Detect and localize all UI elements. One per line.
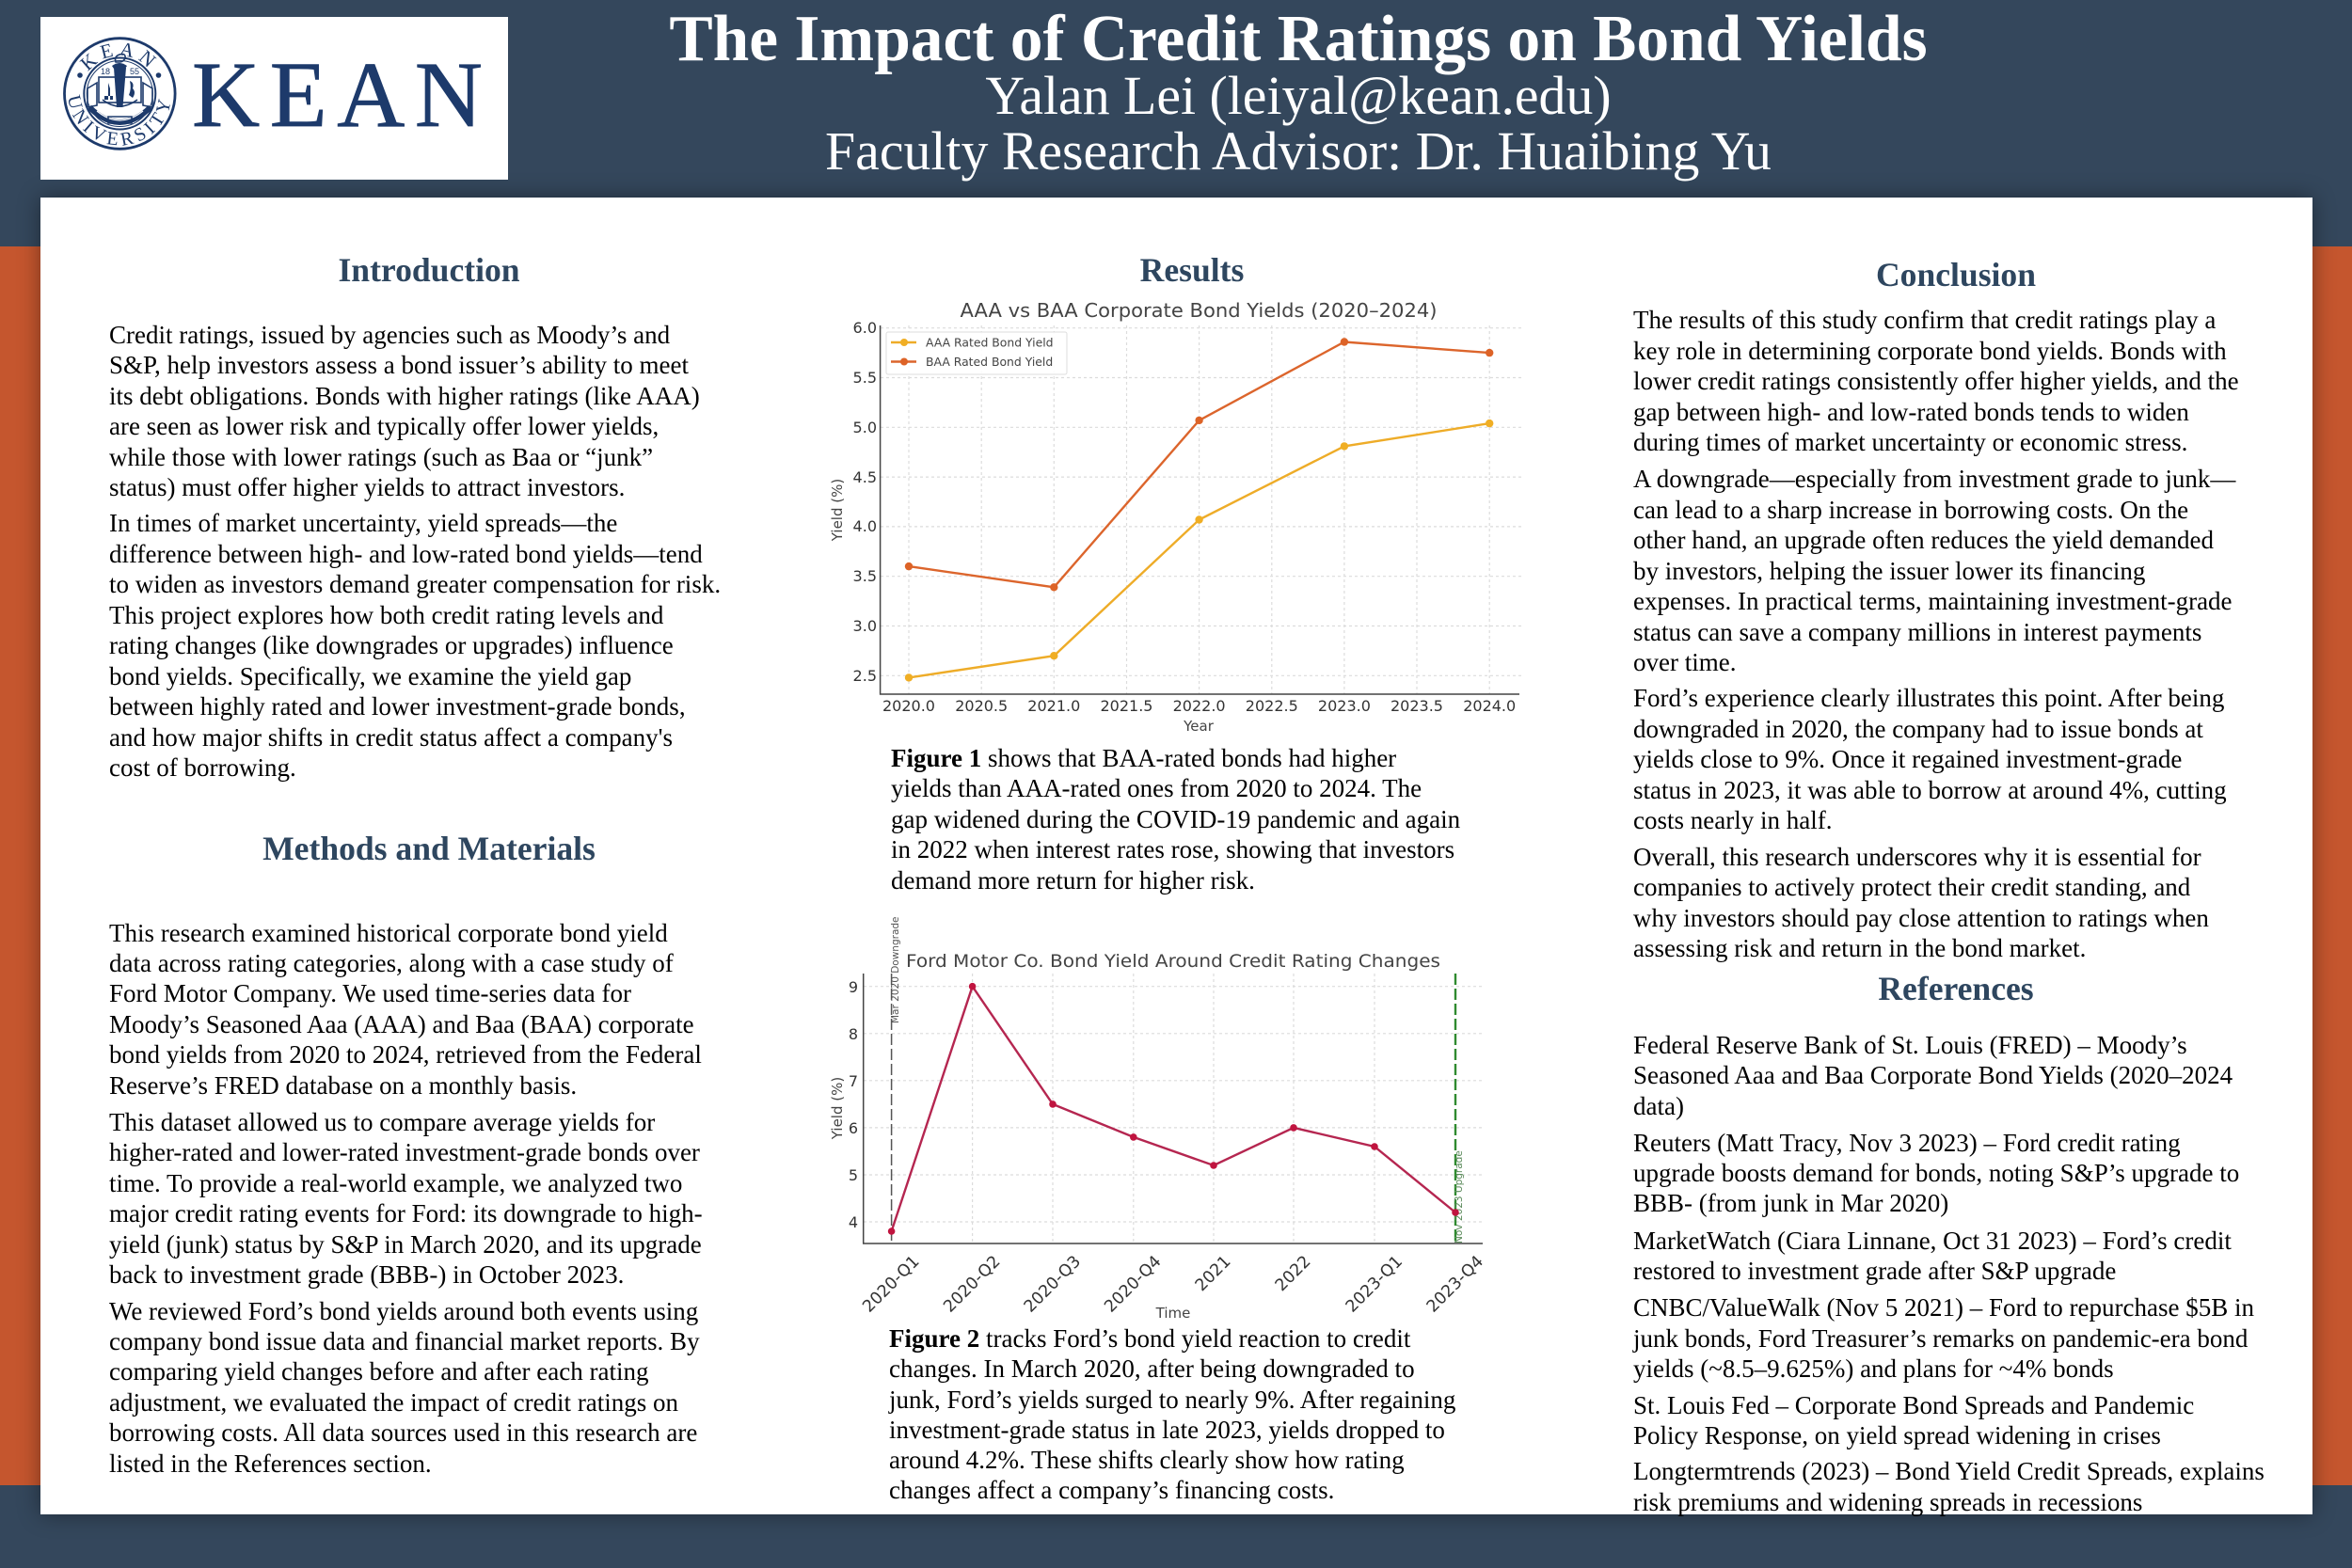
text: conclusion paragraph 1: The results of this study confirm that credit ratings play a [1633,306,2216,334]
y-axis ticks: 4.0 [853,517,877,535]
x-axis ticks: 2020-Q2 [940,1252,1005,1317]
caption: figure 1: Figure 1 shows that BAA-rated bonds had higher [891,744,1396,772]
text: methods paragraph 3 [109,1296,700,1478]
text: methods paragraph 1: Ford Motor Company. We used time-series data for [109,979,631,1007]
reference 2: Reuters (Matt Tracy, Nov 3 2023) – Ford credit rating [1633,1129,2181,1157]
caption: figure 1: yields than AAA-rated ones from 2020 to 2024. The [891,774,1422,802]
text: methods paragraph 1: This research examined historical corporate bond yield [109,918,668,946]
y-axis ticks [853,319,877,685]
text: introduction paragraph 1 [109,321,700,501]
reference 5 [1633,1391,2194,1449]
text: conclusion paragraph 3: Ford’s experience clearly illustrates this point. After being [1633,684,2224,712]
text: conclusion paragraph 4: assessing risk and return in the bond market. [1633,934,2086,962]
text: introduction paragraph 2 [109,509,721,782]
text: methods paragraph 3: adjustment, we evaluated the impact of credit ratings on [109,1388,678,1417]
caption: figure 2: junk, Ford’s yields surged to nearly 9%. After regaining [889,1386,1455,1414]
x-axis ticks: 2022.5 [1246,697,1298,715]
caption: figure 1: in 2022 when interest rates rose, showing that investors [891,835,1454,863]
text: methods paragraph 2: major credit rating events for Ford: its downgrade to high- [109,1199,703,1227]
chart: Ford bond yield line chart [829,916,1487,1322]
series: AAA [905,420,1493,682]
text: introduction paragraph 1: while those with lower ratings (such as Baa or “junk” [109,442,653,470]
y-axis ticks [849,978,858,1231]
reference 5: St. Louis Fed – Corporate Bond Spreads and Pandemic [1633,1391,2194,1419]
reference 3: restored to investment grade after S&P upgrade [1633,1257,2116,1285]
text: introduction paragraph 2: This project explores how both credit rating levels and [109,601,663,629]
reference 2 [1633,1129,2239,1217]
legend: BAA Rated Bond Yield [926,355,1053,369]
text: introduction paragraph 1: its debt obligations. Bonds with higher ratings (like AAA) [109,382,700,410]
y-axis ticks: 2.5 [853,667,877,685]
text: introduction paragraph 2: cost of borrowing. [109,753,296,782]
heading: references: References [1878,970,2034,1007]
heading: results: Results [1140,251,1244,289]
caption: figure 2: changes. In March 2020, after being downgraded to [889,1354,1415,1383]
x-axis ticks [882,697,1516,715]
caption: figure 2: changes affect a company’s financing costs. [889,1476,1334,1504]
panel: introduction [109,251,721,782]
text: methods paragraph 2: yield (junk) status by S&P in March 2020, and its upgrade [109,1230,702,1259]
x-axis ticks: 2020-Q3 [1021,1252,1085,1317]
x-axis ticks: 2020-Q4 [1101,1252,1166,1317]
caption: figure 1: gap widened during the COVID-19 pandemic and again [891,805,1460,833]
marker: upgrade line: Nov 2023 Upgrade [1454,1150,1465,1243]
background: orange side band [0,246,2352,1485]
faculty advisor: Faculty Research Advisor: Dr. Huaibing Yu [825,120,1772,181]
text: introduction paragraph 2: difference between high- and low-rated bond yields—tend [109,540,703,568]
heading: methods and materials: Methods and Materials [262,830,596,867]
panel: conclusion [1633,256,2239,962]
series: BAA [905,338,1493,591]
text: methods paragraph 3: We reviewed Ford’s bond yields around both events using [109,1296,698,1324]
axis label: yield: Yield (%) [829,479,846,542]
chart title: Ford Motor Co. Bond Yield Around Credit Rating Changes [906,951,1440,972]
series: Ford yield [888,983,1459,1235]
text: methods paragraph 3: comparing yield changes before and after each rating [109,1357,648,1386]
y-axis ticks: 9 [849,978,858,996]
text: conclusion paragraph 2: over time. [1633,648,1736,676]
text: conclusion paragraph 4: why investors should pay close attention to ratings when [1633,904,2209,932]
y-axis ticks: 5.5 [853,369,877,387]
text: conclusion paragraph 3: downgraded in 2020, the company had to issue bonds at [1633,715,2203,743]
y-axis ticks: 6.0 [853,319,877,337]
reference 4 [1632,1293,2254,1383]
text: methods paragraph 2 [109,1108,703,1289]
panel: results [829,251,1521,1504]
reference 6: risk premiums and widening spreads in recessions [1633,1488,2142,1516]
reference 1: data) [1633,1092,1684,1120]
y-axis ticks: 3.0 [853,617,877,635]
y-axis ticks: 6 [849,1119,858,1137]
text: introduction paragraph 2: between highly rated and lower investment-grade bonds, [109,692,686,721]
header: title and authors [669,3,1928,181]
text: methods paragraph 2: higher-rated and lower-rated investment-grade bonds over [109,1138,700,1166]
text: introduction paragraph 2: and how major shifts in credit status affect a company's [109,723,673,752]
y-axis ticks: 5 [849,1166,858,1184]
marker: downgrade line: Mar 2020 Downgrade [890,916,901,1023]
text: conclusion paragraph 1 [1633,306,2239,456]
logo: Kean University: KEAN [192,42,483,147]
reference 1: Seasoned Aaa and Baa Corporate Bond Yields (2020–2024 [1633,1061,2233,1089]
axis label: yield: Yield (%) [829,1077,846,1140]
caption: figure 2: Figure 2 tracks Ford’s bond yield reaction to credit [889,1324,1410,1353]
title: The Impact of Credit Ratings on Bond Yields [669,3,1928,75]
text: conclusion paragraph 3: yields close to 9%. Once it regained investment-grade [1633,745,2182,773]
author: Yalan Lei (leiyal@kean.edu) [985,65,1612,126]
y-axis ticks: 8 [849,1025,858,1043]
x-axis ticks [859,1252,1487,1317]
text: methods paragraph 1: bond yields from 2020 to 2024, retrieved from the Federal [109,1040,702,1069]
text: conclusion paragraph 1: lower credit ratings consistently offer higher yields, and the [1633,367,2239,395]
x-axis ticks: 2023.5 [1391,697,1443,715]
logo: Kean University [40,17,508,180]
legend: AAA Rated Bond Yield [926,335,1054,350]
text: conclusion paragraph 2: status can save a company millions in interest payments [1633,618,2201,646]
x-axis ticks: 2024.0 [1463,697,1516,715]
text: methods paragraph 1: data across rating categories, along with a case study of [109,949,674,977]
reference 1 [1633,1031,2233,1120]
text: methods paragraph 1: Moody’s Seasoned Aaa (AAA) and Baa (BAA) corporate [109,1010,694,1038]
text: conclusion paragraph 1: gap between high- and low-rated bonds tends to widen [1633,398,2189,426]
text: introduction paragraph 2: bond yields. Specifically, we examine the yield gap [109,662,631,690]
text: introduction paragraph 2: rating changes (like downgrades or upgrades) influence [109,631,674,659]
x-axis ticks: 2023-Q1 [1343,1252,1406,1317]
text: conclusion paragraph 3: status in 2023, it was able to borrow at around 4%, cutting [1633,776,2227,804]
caption: figure 2: around 4.2%. These shifts clearly show how rating [889,1446,1405,1474]
text: methods paragraph 3: listed in the References section. [109,1449,432,1478]
caption: figure 2 [888,1324,1455,1504]
text: methods paragraph 3: borrowing costs. All data sources used in this research are [109,1418,697,1447]
text: conclusion paragraph 3 [1633,684,2227,834]
text: introduction paragraph 1: are seen as lower risk and typically offer lower yields, [109,412,659,440]
reference 6: Longtermtrends (2023) – Bond Yield Credit Spreads, explains [1633,1457,2265,1485]
text: conclusion paragraph 2: A downgrade—especially from investment grade to junk— [1633,465,2235,493]
x-axis ticks: 2023-Q4 [1423,1252,1487,1317]
reference 2: upgrade boosts demand for bonds, noting S&P’s upgrade to [1633,1159,2239,1187]
x-axis ticks: 2020.5 [955,697,1008,715]
text: methods paragraph 2: back to investment grade (BBB-) in October 2023. [109,1260,624,1289]
text: introduction paragraph 1: Credit ratings, issued by agencies such as Moody’s and [109,321,670,349]
x-axis ticks: 2020.0 [882,697,935,715]
panel: methods and materials [109,830,703,1478]
text: conclusion paragraph 2: by investors, helping the issuer lower its financing [1633,557,2145,585]
x-axis ticks: 2021 [1192,1252,1235,1295]
y-axis ticks: 7 [849,1072,858,1090]
legend [886,332,1067,374]
text: conclusion paragraph 4 [1633,843,2209,962]
reference 4: CNBC/ValueWalk (Nov 5 2021) – Ford to repurchase $5B in [1633,1293,2254,1322]
text: methods paragraph 1 [109,918,702,1100]
heading: introduction: Introduction [338,251,520,289]
text: methods paragraph 3: company bond issue data and financial market reports. By [109,1327,700,1355]
text: introduction paragraph 2: to widen as investors demand greater compensation for risk. [109,570,721,598]
axis label: time: Time [1155,1305,1190,1322]
reference 3 [1633,1227,2232,1285]
reference 4: yields (~8.5–9.625%) and plans for ~4% bonds [1633,1354,2114,1383]
reference 2: BBB- (from junk in Mar 2020) [1633,1189,1948,1217]
caption: figure 1 [891,744,1460,895]
text: conclusion paragraph 2: can lead to a sharp increase in borrowing costs. On the [1633,496,2188,524]
panel: references [1632,970,2265,1516]
y-axis ticks: 3.5 [853,567,877,585]
axis label: year: Year [1183,718,1215,735]
logo: Kean University: 55 [130,67,139,76]
heading: conclusion: Conclusion [1876,256,2036,293]
x-axis ticks: 2021.5 [1101,697,1152,715]
y-axis ticks: 5.0 [853,419,877,436]
text: introduction paragraph 1: S&P, help investors assess a bond issuer’s ability to meet [109,351,689,379]
x-axis ticks: 2023.0 [1318,697,1371,715]
text: conclusion paragraph 4: companies to actively protect their credit standing, and [1633,873,2190,901]
reference 3: MarketWatch (Ciara Linnane, Oct 31 2023) – Ford’s credit [1633,1227,2232,1255]
reference 4: junk bonds, Ford Treasurer’s remarks on pandemic-era bond [1633,1324,2248,1353]
text: methods paragraph 2: time. To provide a real-world example, we analyzed two [109,1169,682,1197]
text: conclusion paragraph 2 [1633,465,2236,676]
x-axis ticks: 2020-Q1 [859,1252,924,1317]
text: conclusion paragraph 3: costs nearly in half. [1633,806,1832,834]
text: introduction paragraph 1: status) must offer higher yields to attract investors. [109,473,625,501]
y-axis ticks: 4.5 [853,468,877,486]
text: introduction paragraph 2: In times of market uncertainty, yield spreads—the [109,509,617,537]
y-axis ticks: 4 [849,1213,858,1231]
x-axis ticks: 2021.0 [1027,697,1080,715]
x-axis ticks: 2022 [1272,1252,1315,1295]
logo: Kean University: KEAN [79,43,156,71]
text: conclusion paragraph 4: Overall, this research underscores why it is essential for [1633,843,2201,871]
text: conclusion paragraph 2: expenses. In practical terms, maintaining investment-grade [1633,587,2233,615]
caption: figure 1: demand more return for higher risk. [891,865,1255,894]
text: methods paragraph 2: This dataset allowed us to compare average yields for [109,1108,655,1136]
reference 6 [1633,1457,2265,1516]
chart title: AAA vs BAA Corporate Bond Yields (2020–2024) [960,299,1438,322]
text: conclusion paragraph 1: during times of market uncertainty or economic stress. [1633,428,2187,456]
reference 5: Policy Response, on yield spread widening in crises [1633,1421,2161,1449]
logo: Kean University: UNIVERSITY [69,94,170,146]
text: methods paragraph 1: Reserve’s FRED database on a monthly basis. [109,1071,577,1100]
caption: figure 2: investment-grade status in late 2023, yields dropped to [889,1416,1445,1444]
logo: Kean University: 18 [101,67,110,76]
x-axis ticks: 2022.0 [1173,697,1226,715]
reference 1: Federal Reserve Bank of St. Louis (FRED) – Moody’s [1633,1031,2187,1059]
text: conclusion paragraph 2: other hand, an upgrade often reduces the yield demanded [1633,526,2214,554]
chart: AAA vs BAA line chart [829,299,1521,735]
text: conclusion paragraph 1: key role in determining corporate bond yields. Bonds with [1633,337,2227,365]
